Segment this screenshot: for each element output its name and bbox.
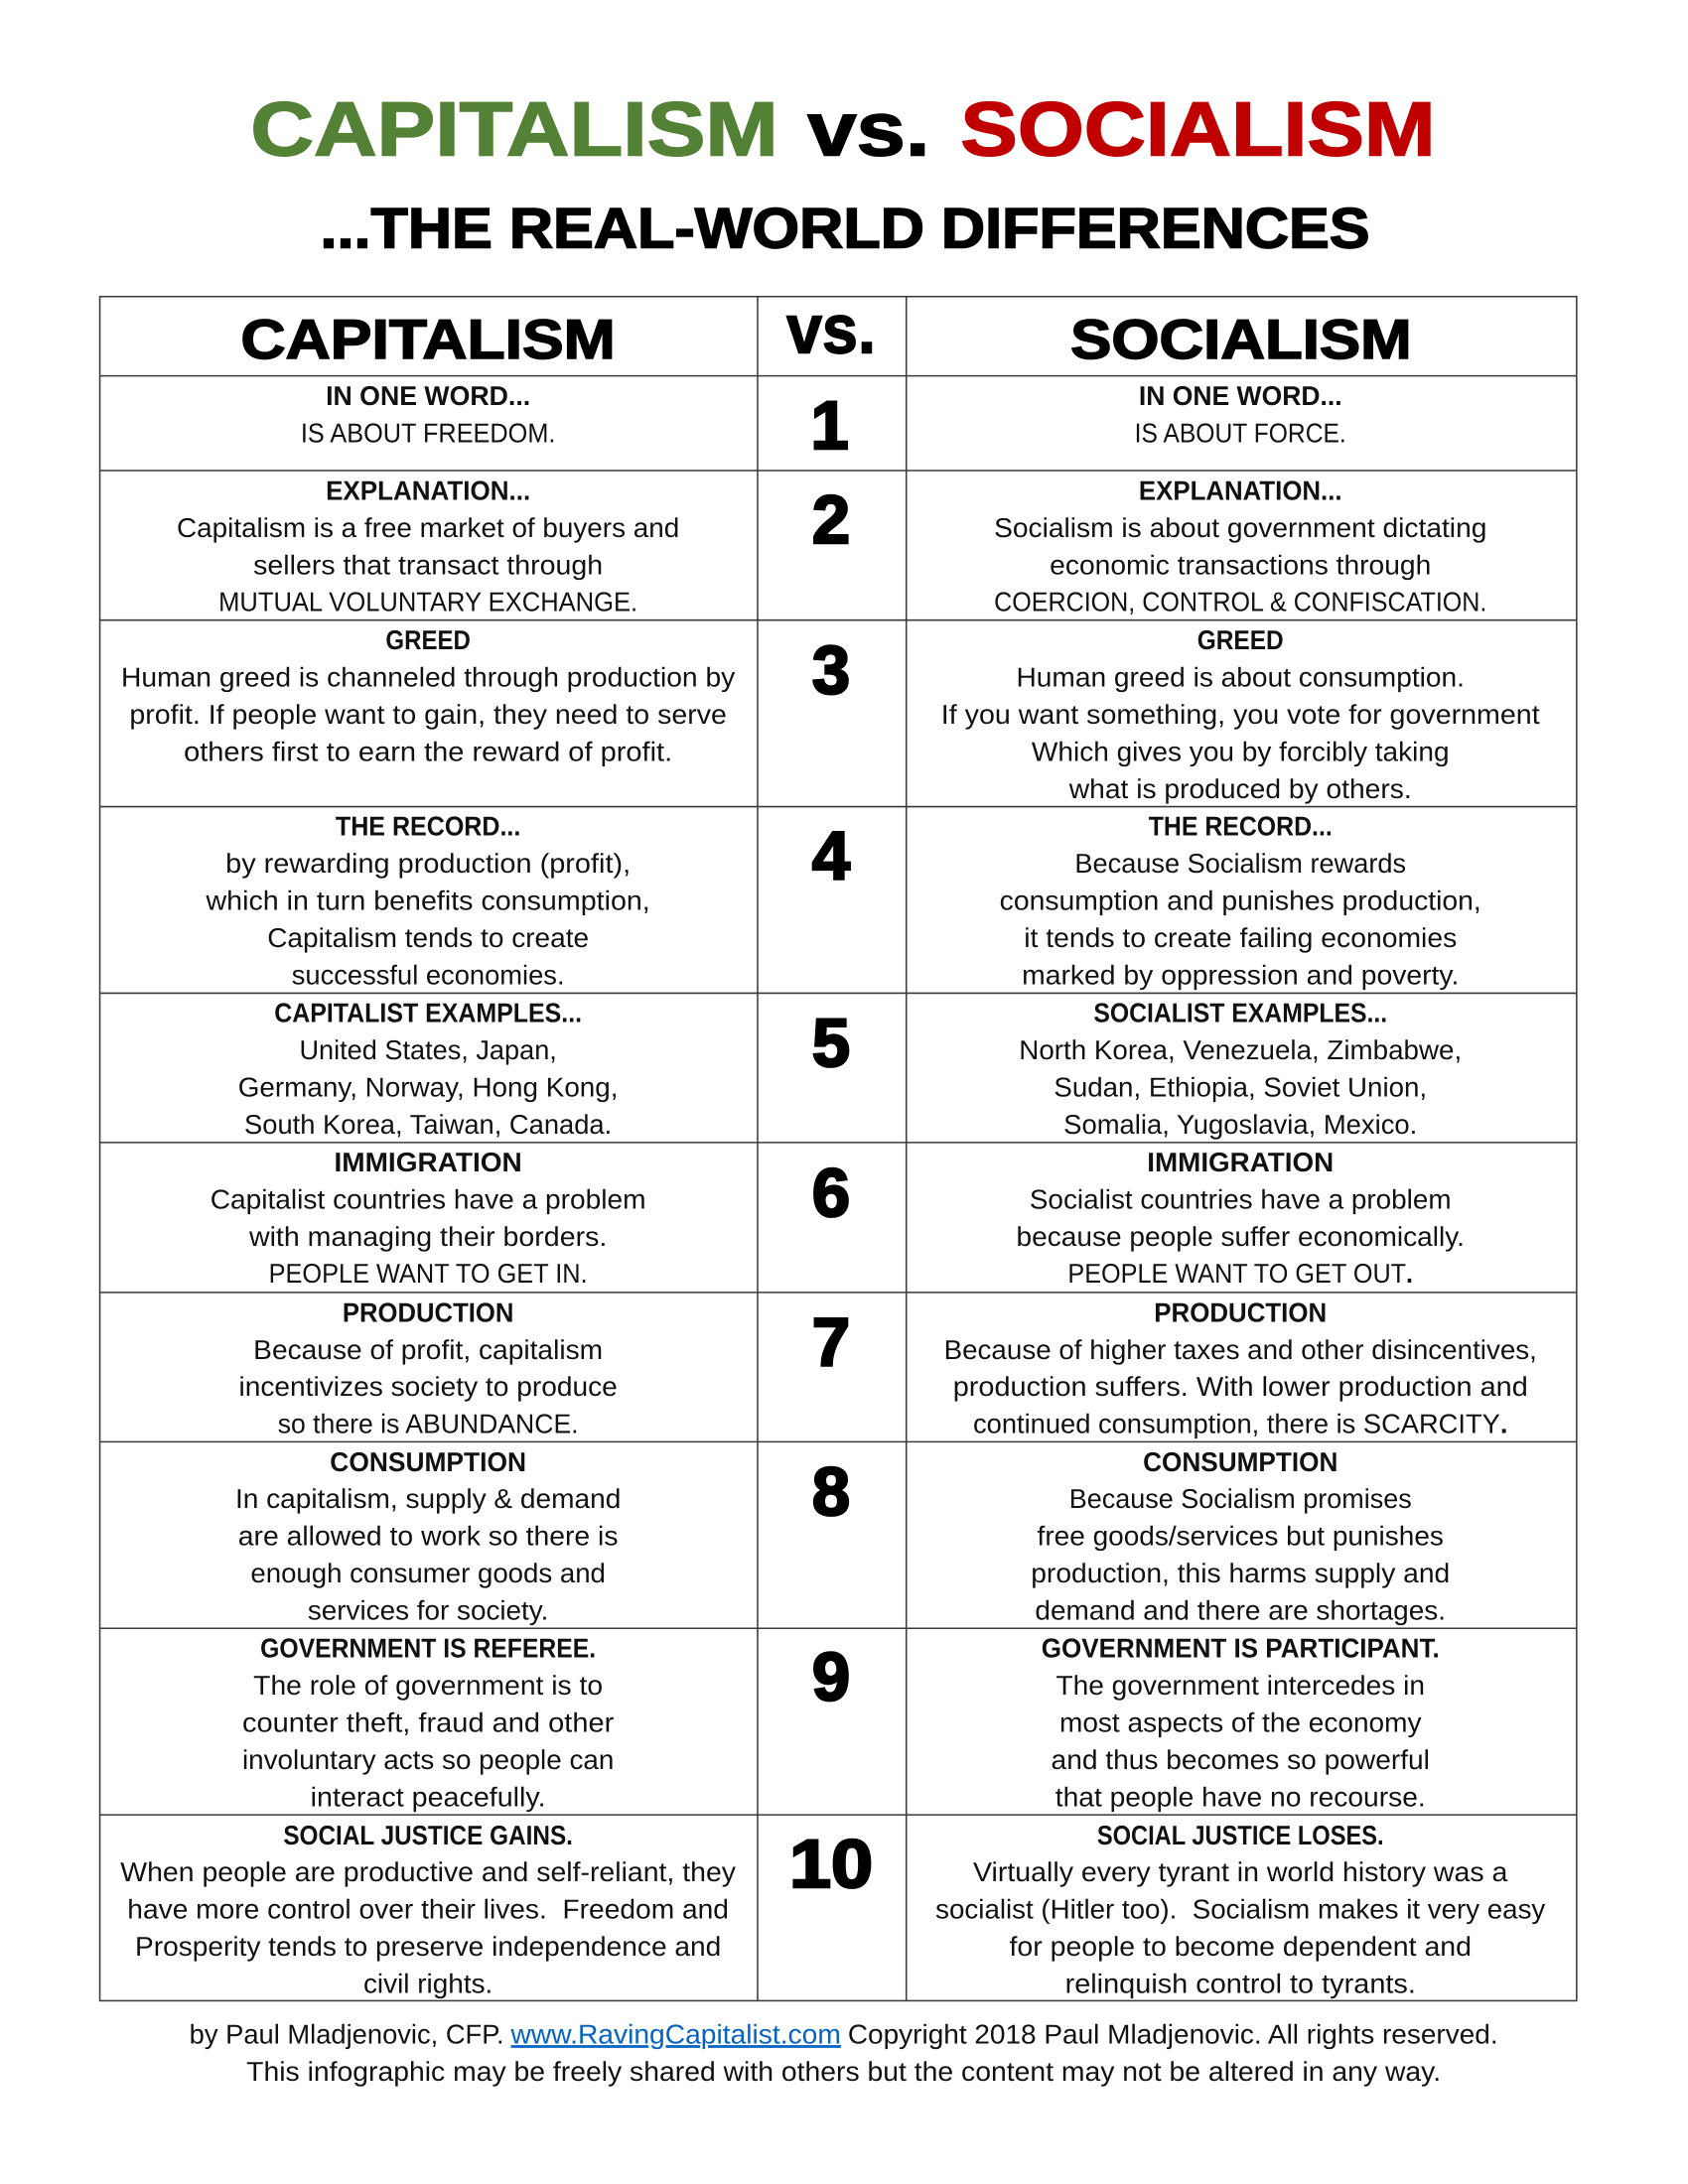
socialism cell (1017, 1148, 1465, 1290)
title word: vs.: vs. (807, 85, 930, 172)
capitalism cell: EXPLANATION... (326, 477, 530, 506)
socialism cell: EXPLANATION... (1139, 477, 1342, 506)
socialism cell: socialist (Hitler too). Socialism makes it very easy (935, 1895, 1546, 1926)
capitalism cell: The role of government is to (253, 1671, 603, 1702)
socialism cell: that people have no recourse. (1055, 1783, 1426, 1813)
capitalism cell: services for society. (308, 1596, 548, 1627)
capitalism cell: PRODUCTION (343, 1298, 513, 1328)
socialism cell: Which gives you by forcibly taking (1032, 738, 1450, 767)
capitalism cell: Capitalism tends to create (267, 923, 589, 954)
socialism cell: consumption and punishes production, (1000, 887, 1481, 917)
capitalism cell: with managing their borders. (248, 1222, 607, 1253)
row 1: in one word (301, 381, 1346, 465)
socialism cell: THE RECORD... (1149, 812, 1333, 843)
capitalism cell: which in turn benefits consumption, (205, 887, 650, 917)
row 7: production (238, 1298, 1537, 1440)
capitalism cell: Human greed is channeled through production by (121, 663, 736, 694)
capitalism cell (121, 625, 736, 767)
title word: capitalism: CAPITALISM (250, 85, 778, 172)
number 4: 4 (812, 819, 850, 894)
socialism cell: Socialism is about government dictating (994, 513, 1486, 544)
capitalism cell: sellers that transact through (253, 550, 603, 581)
socialism cell: PRODUCTION (1154, 1298, 1327, 1328)
socialism cell: Because Socialism promises (1069, 1484, 1412, 1515)
capitalism cell: profit. If people want to gain, they need to serve (129, 700, 727, 731)
number 8: 8 (812, 1455, 850, 1531)
socialism cell: Virtually every tyrant in world history was a (973, 1857, 1508, 1888)
socialism cell: it tends to create failing economies (1024, 923, 1458, 954)
capitalism cell: are allowed to work so there is (238, 1522, 619, 1553)
row 8: consumption (235, 1447, 1450, 1627)
capitalism cell: so there is ABUNDANCE. (278, 1410, 579, 1440)
capitalism cell: others first to earn the reward of profit. (184, 738, 672, 767)
socialism cell: SOCIALIST EXAMPLES... (1093, 999, 1387, 1028)
capitalism cell: interact peacefully. (311, 1783, 546, 1813)
capitalism cell: by rewarding production (profit), (225, 849, 631, 880)
subtitle: ...THE REAL-WORLD DIFFERENCES (320, 197, 1370, 260)
column heading: capitalism: CAPITALISM (241, 310, 616, 371)
capitalism cell (242, 1634, 615, 1813)
number 10: 10 (789, 1828, 873, 1902)
website link: www.RavingCapitalist.com (509, 2020, 841, 2051)
socialism cell: demand and there are shortages. (1035, 1596, 1446, 1627)
number 7: 7 (812, 1305, 850, 1381)
socialism cell: Because of higher taxes and other disincentives, (944, 1335, 1537, 1366)
capitalism cell: IS ABOUT FREEDOM. (301, 419, 555, 450)
capitalism cell: When people are productive and self-reliant, they (120, 1857, 736, 1888)
column heading: vs.: vs. (786, 290, 876, 368)
socialism cell: Human greed is about consumption. (1017, 663, 1465, 694)
socialism cell: and thus becomes so powerful (1052, 1745, 1430, 1776)
capitalism cell: IN ONE WORD... (326, 381, 530, 412)
capitalism cell: THE RECORD... (336, 812, 520, 843)
number 2: 2 (812, 483, 850, 558)
socialism cell: production suffers. With lower production and (953, 1372, 1528, 1403)
socialism cell (941, 625, 1541, 805)
capitalism cell: South Korea, Taiwan, Canada. (244, 1110, 612, 1141)
capitalism cell (238, 999, 619, 1141)
row 6: immigration (211, 1148, 1465, 1290)
number 3: 3 (812, 633, 850, 709)
socialism cell: relinquish control to tyrants. (1065, 1970, 1416, 2000)
socialism cell: because people suffer economically. (1017, 1222, 1465, 1253)
capitalism cell: Germany, Norway, Hong Kong, (238, 1073, 619, 1103)
capitalism cell: Because of profit, capitalism (253, 1335, 603, 1366)
capitalism cell: Prosperity tends to preserve independence and (135, 1932, 721, 1963)
capitalism cell: enough consumer goods and (250, 1559, 606, 1589)
capitalism cell: successful economies. (292, 961, 565, 991)
socialism cell: marked by oppression and poverty. (1022, 961, 1459, 991)
socialism cell: CONSUMPTION (1143, 1447, 1337, 1478)
socialism cell: IS ABOUT FORCE. (1135, 419, 1346, 450)
number 6: 6 (812, 1156, 850, 1231)
capitalism cell: PEOPLE WANT TO GET IN. (269, 1259, 588, 1290)
socialism cell: most aspects of the economy (1059, 1708, 1422, 1739)
socialism cell: IN ONE WORD... (1139, 381, 1342, 412)
capitalism cell: In capitalism, supply & demand (235, 1484, 621, 1515)
socialism cell: If you want something, you vote for government (941, 700, 1541, 731)
capitalism cell (211, 1148, 646, 1290)
table grid (100, 297, 1577, 2000)
footer credits: Copyright 2018 Paul Mladjenovic. All rights reserved. (848, 2020, 1498, 2051)
capitalism cell: civil rights. (363, 1970, 492, 2000)
capitalism cell: counter theft, fraud and other (242, 1708, 615, 1739)
capitalism cell: Capitalist countries have a problem (211, 1185, 646, 1215)
footer credits: by Paul Mladjenovic, CFP. (190, 2020, 504, 2051)
capitalism cell: MUTUAL VOLUNTARY EXCHANGE. (218, 588, 637, 618)
number 1: 1 (811, 389, 849, 465)
capitalism cell: SOCIAL JUSTICE GAINS. (283, 1821, 573, 1851)
socialism cell (1031, 1447, 1450, 1627)
capitalism cell: incentivizes society to produce (238, 1372, 618, 1403)
capitalism cell: IMMIGRATION (334, 1148, 522, 1178)
capitalism cell: GREED (385, 625, 471, 656)
capitalism cell: CONSUMPTION (330, 1447, 526, 1478)
socialism cell (935, 1821, 1546, 2000)
socialism cell: IMMIGRATION (1147, 1148, 1334, 1178)
socialism cell: Somalia, Yugoslavia, Mexico. (1063, 1110, 1417, 1141)
capitalism cell (238, 1298, 618, 1440)
row 4: the record (205, 812, 1481, 991)
socialism cell (1135, 381, 1346, 450)
capitalism cell (205, 812, 650, 991)
capitalism cell: involuntary acts so people can (242, 1745, 614, 1776)
socialism cell: Sudan, Ethiopia, Soviet Union, (1054, 1073, 1427, 1103)
number 9: 9 (812, 1640, 850, 1715)
capitalism cell (301, 381, 555, 450)
capitalism cell: Capitalism is a free market of buyers and (177, 513, 679, 544)
socialism cell (1000, 812, 1481, 991)
socialism cell: GREED (1197, 625, 1284, 656)
footer credits (190, 2020, 1498, 2088)
socialism cell (1042, 1634, 1440, 1813)
socialism cell (944, 1298, 1537, 1440)
socialism cell (1019, 999, 1462, 1141)
row 10: social justice (120, 1821, 1546, 2000)
capitalism cell (120, 1821, 736, 2000)
capitalism cell: GOVERNMENT IS REFEREE. (260, 1634, 596, 1665)
title (250, 85, 1436, 172)
row 9: government (242, 1634, 1440, 1813)
socialism cell: for people to become dependent and (1009, 1932, 1472, 1963)
socialism cell: free goods/services but punishes (1038, 1522, 1444, 1553)
column heading: socialism: SOCIALISM (1070, 310, 1412, 371)
title word: socialism: SOCIALISM (960, 85, 1436, 172)
socialism cell (994, 477, 1486, 618)
socialism cell: PEOPLE WANT TO GET OUT. (1067, 1259, 1413, 1290)
row 3: greed (121, 625, 1541, 805)
socialism cell: Socialist countries have a problem (1030, 1185, 1452, 1215)
socialism cell: COERCION, CONTROL & CONFISCATION. (994, 588, 1486, 618)
socialism cell: SOCIAL JUSTICE LOSES. (1097, 1821, 1384, 1851)
footer credits: This infographic may be freely shared with others but the content may not be altered in any way. (246, 2057, 1441, 2088)
table header row (241, 290, 1412, 371)
capitalism cell: United States, Japan, (299, 1035, 557, 1066)
socialism cell: production, this harms supply and (1031, 1559, 1450, 1589)
row 5: examples (238, 999, 1462, 1141)
socialism cell: what is produced by others. (1067, 774, 1412, 805)
socialism cell: continued consumption, there is SCARCITY. (973, 1410, 1507, 1440)
capitalism cell (235, 1447, 621, 1627)
capitalism cell: have more control over their lives. Freedom and (127, 1895, 729, 1926)
capitalism cell: CAPITALIST EXAMPLES... (274, 999, 582, 1028)
socialism cell: North Korea, Venezuela, Zimbabwe, (1019, 1035, 1462, 1066)
row 2: explanation (177, 477, 1486, 618)
socialism cell: The government intercedes in (1055, 1671, 1425, 1702)
number 5: 5 (812, 1007, 850, 1081)
socialism cell: economic transactions through (1050, 550, 1431, 581)
capitalism cell (177, 477, 679, 618)
socialism cell: GOVERNMENT IS PARTICIPANT. (1042, 1634, 1440, 1665)
socialism cell: Because Socialism rewards (1074, 849, 1406, 880)
